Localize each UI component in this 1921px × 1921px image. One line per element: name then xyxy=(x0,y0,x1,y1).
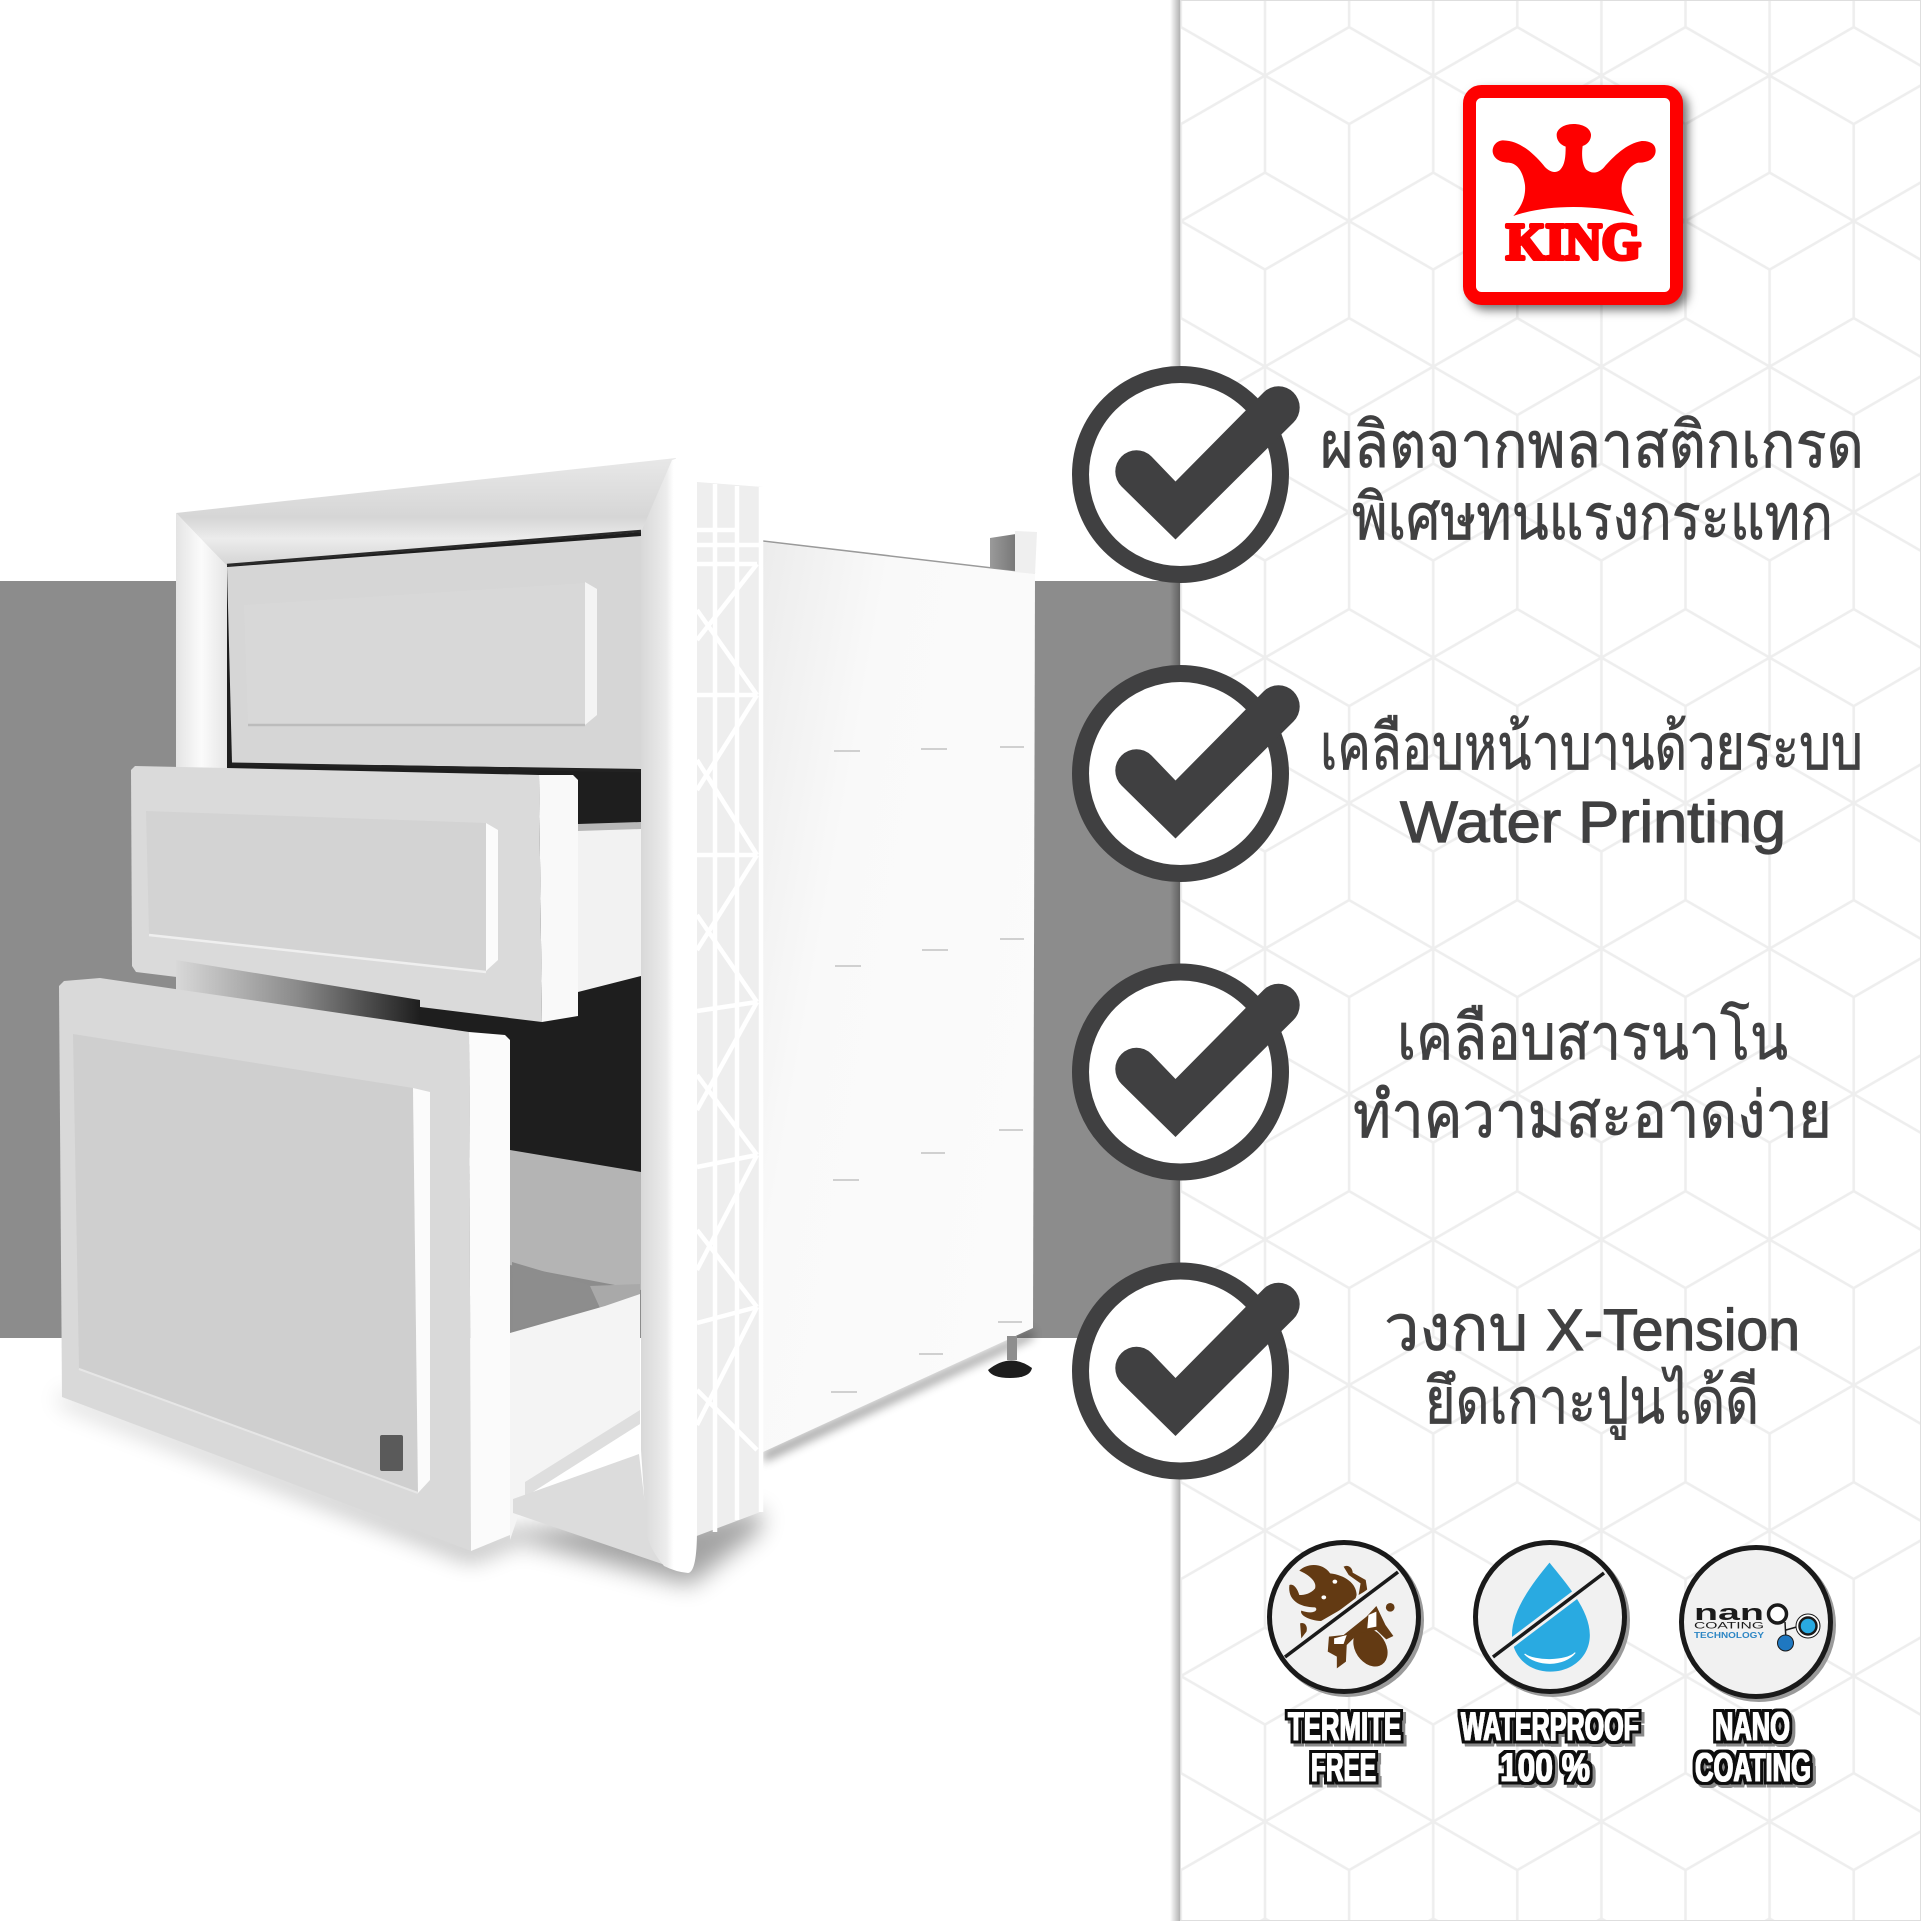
check 2 xyxy=(1080,674,1300,874)
check 1 xyxy=(1080,374,1300,574)
drawer 3 interior back wall xyxy=(510,1150,641,1290)
top drawer panel xyxy=(244,583,585,724)
text: feature 2: Water Printing xyxy=(1400,790,1786,855)
badge label: TERMITE xyxy=(1288,1705,1401,1749)
middle drawer handle xyxy=(486,823,498,971)
bottom drawer badge xyxy=(380,1435,403,1471)
levelling foot xyxy=(988,1336,1032,1378)
nano coating logo: COATING xyxy=(1694,1620,1764,1630)
drawer 3 metal bar xyxy=(590,1284,640,1308)
text: feature 4 xyxy=(1384,1292,1800,1440)
drawer 3 side xyxy=(510,1294,640,1540)
text: feature 2 xyxy=(1320,711,1863,855)
icon: water drop xyxy=(1512,1563,1590,1672)
logo: KING xyxy=(1470,92,1676,298)
text: feature 1: พิเศษทนแรงกระแทก xyxy=(1352,481,1833,553)
text: feature 1: ผลิตจากพลาสติกเกรด xyxy=(1320,409,1864,481)
check 3 xyxy=(1080,972,1300,1172)
no-entry slash xyxy=(1493,1573,1604,1657)
badge label: FREE xyxy=(1311,1746,1376,1790)
badge label xyxy=(1288,1705,1401,1790)
logo frame xyxy=(1470,92,1676,298)
product: three-drawer cabinet xyxy=(59,458,1037,1585)
badge label: 100 % xyxy=(1500,1746,1590,1790)
badge label xyxy=(1695,1705,1811,1790)
frame left post xyxy=(176,513,227,980)
text: feature 4: ยึดเกาะปูนได้ดี xyxy=(1425,1365,1759,1440)
top drawer xyxy=(227,536,641,771)
text: feature 3: เคลือบสารนาโน xyxy=(1397,1001,1788,1073)
no-entry slash xyxy=(1285,1572,1398,1657)
badge: nano coating xyxy=(1682,1548,1830,1790)
text: feature 3: ทำความสะอาดง่าย xyxy=(1353,1079,1832,1151)
waterproof badge circle xyxy=(1476,1542,1624,1692)
drawer 3 interior floor xyxy=(512,1262,605,1330)
ribbed lattice side xyxy=(694,482,763,1537)
icon: crown xyxy=(1493,124,1656,216)
badge label xyxy=(1461,1705,1639,1790)
text: feature 1 xyxy=(1320,409,1864,553)
nano coating logo xyxy=(1694,1600,1820,1651)
floor shadow xyxy=(59,1395,762,1585)
frame top moulding xyxy=(176,458,676,566)
grey background band xyxy=(0,581,1180,1338)
badge: termite free xyxy=(1270,1542,1418,1790)
nano badge circle xyxy=(1682,1548,1830,1696)
side panel xyxy=(763,541,1035,1452)
termite badge circle xyxy=(1270,1542,1418,1692)
badge label: NANO xyxy=(1715,1705,1790,1749)
frame top shadow line xyxy=(227,531,641,565)
bottom drawer xyxy=(59,978,510,1551)
frame bottom rail xyxy=(513,1454,668,1566)
frame right post xyxy=(641,458,697,1573)
badge: waterproof xyxy=(1461,1542,1639,1790)
brand name: KING xyxy=(1506,214,1641,271)
check 4 xyxy=(1080,1271,1300,1471)
nano coating logo: TECHNOLOGY xyxy=(1694,1630,1764,1640)
bottom drawer handle xyxy=(413,1088,430,1493)
badge label: COATING xyxy=(1695,1746,1811,1790)
nano coating logo: nan xyxy=(1694,1600,1764,1625)
badge label: WATERPROOF xyxy=(1461,1705,1639,1749)
text: feature 3 xyxy=(1353,1001,1832,1151)
middle drawer xyxy=(131,766,578,1022)
bottom drawer panel xyxy=(73,1034,418,1492)
side panel shadow xyxy=(763,1330,1033,1462)
gap strip under middle drawer xyxy=(176,960,420,1030)
middle drawer panel xyxy=(146,811,486,971)
drawer 2 side box xyxy=(578,826,641,992)
right panel with hexagon pattern xyxy=(1180,0,1921,1921)
icon: termite xyxy=(1289,1565,1395,1671)
bracket top right xyxy=(990,531,1037,574)
text: feature 4: วงกบ X-Tension xyxy=(1384,1292,1800,1364)
panel shadow edge xyxy=(1170,0,1180,1921)
drawer 3 runner xyxy=(525,1410,640,1497)
interior dark cavity xyxy=(227,532,641,1180)
top drawer handle xyxy=(585,582,597,725)
